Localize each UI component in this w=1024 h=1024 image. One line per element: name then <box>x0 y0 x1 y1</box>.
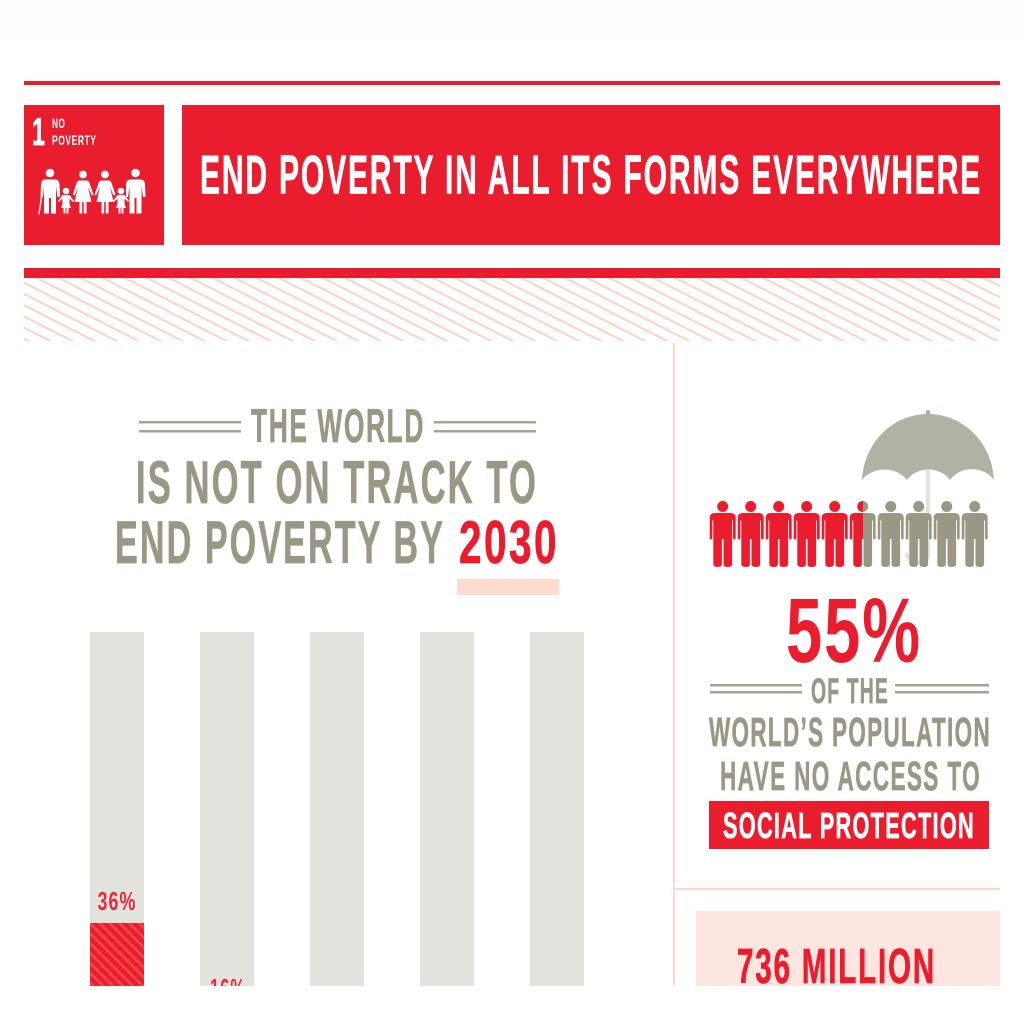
header bottom bar <box>24 268 1000 278</box>
icon: family <box>38 169 146 214</box>
panel: 736 million <box>696 911 1000 994</box>
panel dividers <box>673 343 1000 986</box>
bottom crop mask <box>0 986 1024 1024</box>
stat: 55 percent: 55% <box>786 580 922 682</box>
heading: the world is not on track: END POVERTY BY <box>115 508 445 576</box>
stat: 55 percent <box>709 580 991 849</box>
icon: umbrella <box>862 410 994 564</box>
badge number: 1 <box>32 111 45 154</box>
badge label: NO <box>52 115 66 131</box>
stat: 55 percent: OF THE <box>811 672 889 711</box>
bar chart: 16% <box>210 973 246 1003</box>
bar chart <box>90 632 584 1003</box>
heading: the world is not on track <box>115 400 559 595</box>
bar chart: 36% <box>98 886 136 916</box>
header top rule <box>24 81 1000 85</box>
badge label <box>52 115 96 148</box>
badge label: POVERTY <box>52 132 96 148</box>
SDG 1 badge <box>24 105 164 245</box>
icon: people row <box>710 501 988 567</box>
title banner <box>182 105 1000 245</box>
heading: the world is not on track: 2030 <box>459 508 559 576</box>
heading: the world is not on track: IS NOT ON TRACK TO <box>136 448 538 516</box>
heading: the world is not on track: THE WORLD <box>251 400 425 453</box>
